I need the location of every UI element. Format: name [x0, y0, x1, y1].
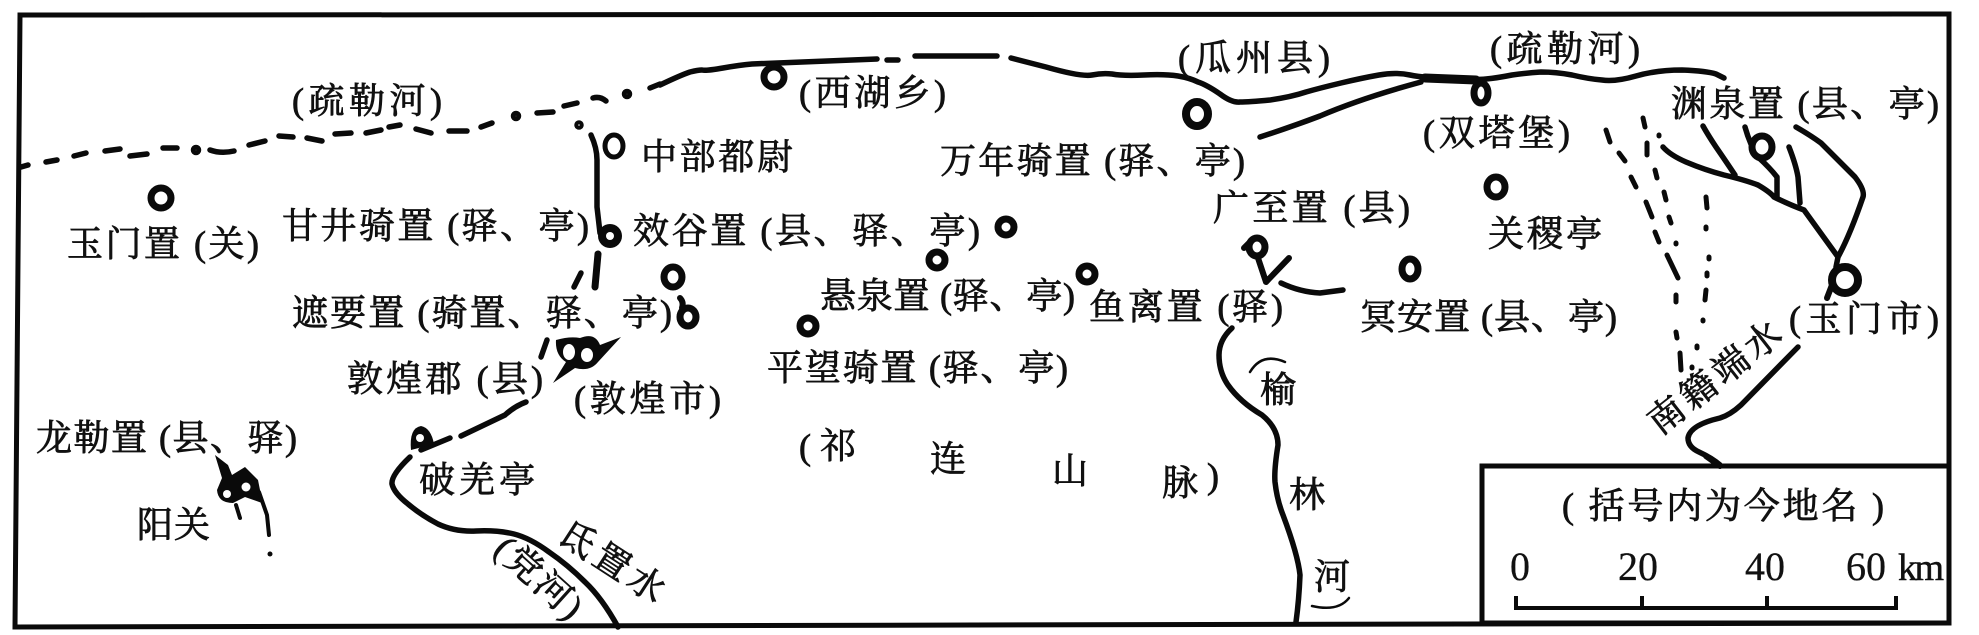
scale bar	[1516, 596, 1896, 608]
marker: Xuanquan	[929, 252, 945, 268]
label: Shuangta fort: (双塔堡)	[1423, 113, 1570, 153]
label: Ming'an: 冥安置 (县、亭)	[1360, 297, 1617, 337]
river: central north-south channel	[541, 123, 600, 357]
legend note: ( 括号内为今地名 )	[1562, 486, 1884, 526]
label: Yumen City: (玉门市)	[1789, 299, 1939, 339]
label: Guanji pavilion: 关稷亭	[1488, 214, 1602, 254]
label: Dizhi water: 氐置水	[552, 513, 672, 611]
river: Guangzhi branch	[1281, 283, 1343, 293]
marker: Guanji	[1487, 177, 1505, 197]
scale numbers	[1510, 544, 1944, 589]
scale numbers: 0	[1510, 544, 1530, 589]
label: Xihu township: (西湖乡)	[799, 73, 946, 113]
marker: Guangzhi	[1244, 238, 1289, 282]
label: Qilian mountains open paren: (	[799, 427, 811, 467]
label: Guangzhi: 广至置 (县)	[1213, 188, 1410, 228]
label: Lin: 林	[1289, 475, 1325, 515]
scale numbers: 40	[1745, 544, 1785, 589]
arc below He	[1312, 598, 1349, 608]
river: dotted seasonal channels	[1606, 118, 1709, 370]
river: Yulin River	[1219, 328, 1300, 622]
label: Shan: 山	[1052, 451, 1088, 491]
label: Yuanquan: 渊泉置 (县、亭)	[1671, 84, 1939, 124]
label: Mai: 脉	[1162, 463, 1198, 503]
river: dashed Shule River west	[21, 84, 660, 167]
label: He: 河	[1314, 557, 1350, 597]
label: Shule River east: (疏勒河)	[1490, 29, 1640, 69]
marker: Yumen	[151, 188, 171, 208]
arc above Yu	[1250, 359, 1285, 372]
label: Qilian mountains close paren: )	[1207, 456, 1219, 496]
marker: Yumen City	[1827, 267, 1858, 298]
label: Nanjiduan water: 南籍端水	[1640, 314, 1789, 442]
river: lower Shule branch	[1260, 82, 1421, 137]
marker: Wannian	[1186, 102, 1208, 126]
label: Yu: 榆	[1260, 370, 1296, 410]
river: thick confluence	[1425, 78, 1476, 80]
label: Xuanquan: 悬泉置 (驿、亭)	[820, 276, 1075, 316]
label: Yuli: 鱼离置 (驿)	[1089, 287, 1283, 327]
marker: Zhongbu	[605, 135, 623, 157]
settlement markers	[151, 67, 1858, 556]
marker: Pingwang	[800, 318, 816, 334]
label: Ganjing: 甘井骑置 (驿、亭)	[282, 206, 589, 246]
river: solid Shule River	[660, 56, 1724, 102]
label: Wannian: 万年骑置 (驿、亭)	[940, 141, 1245, 181]
marker: Xiaogu	[598, 224, 622, 248]
legend frame	[1482, 466, 1949, 623]
label: Lian: 连	[930, 439, 966, 479]
river: Nanjiduan water	[1688, 347, 1798, 465]
river: Yuanquan branches	[1663, 126, 1863, 267]
label: Poqiang: 破羌亭	[419, 460, 535, 500]
label: Qi: 祁	[820, 426, 856, 466]
label: Zheyao: 遮要置 (骑置、驿、亭)	[292, 293, 672, 333]
marker: Ming'an	[1402, 259, 1418, 279]
marker: Xiaogu east	[998, 219, 1014, 235]
marker: Zheyao south	[680, 298, 696, 326]
marker: Shuangta	[1474, 83, 1488, 103]
label: Yumen station: 玉门置 (关)	[67, 224, 259, 264]
label: Pingwang: 平望骑置 (驿、亭)	[767, 348, 1068, 388]
scale numbers: 60	[1846, 544, 1886, 589]
label: Yangguan: 阳关	[137, 505, 210, 545]
label: Xiaogu: 效谷置 (县、驿、亭)	[633, 211, 980, 251]
label: Dang River: (党河)	[487, 528, 591, 628]
scale numbers: km	[1898, 547, 1944, 589]
label: Guazhou county: (瓜州县)	[1178, 38, 1330, 78]
marker: Poqiang	[411, 426, 434, 450]
label: Zhongbu commandant: 中部都尉	[641, 137, 793, 177]
legend box	[1482, 456, 1949, 623]
label: Longle: 龙勒置 (县、驿)	[36, 418, 297, 458]
river: Dang River	[392, 402, 618, 627]
marker: Yangguan	[215, 455, 272, 556]
marker: Xihu	[764, 67, 784, 87]
marker: Yuanquan	[1752, 136, 1772, 158]
marker: Yuli north	[1079, 266, 1095, 282]
label: Dunhuang City: (敦煌市)	[574, 379, 721, 419]
label: Shule River west: (疏勒河)	[292, 81, 442, 121]
scale numbers: 20	[1618, 544, 1658, 589]
river mouth over legend	[1706, 456, 1720, 466]
marker: Zheyao north	[664, 267, 682, 287]
marker: Dunhuang	[553, 336, 621, 383]
label: Dunhuang commandery: 敦煌郡 (县)	[347, 359, 543, 399]
